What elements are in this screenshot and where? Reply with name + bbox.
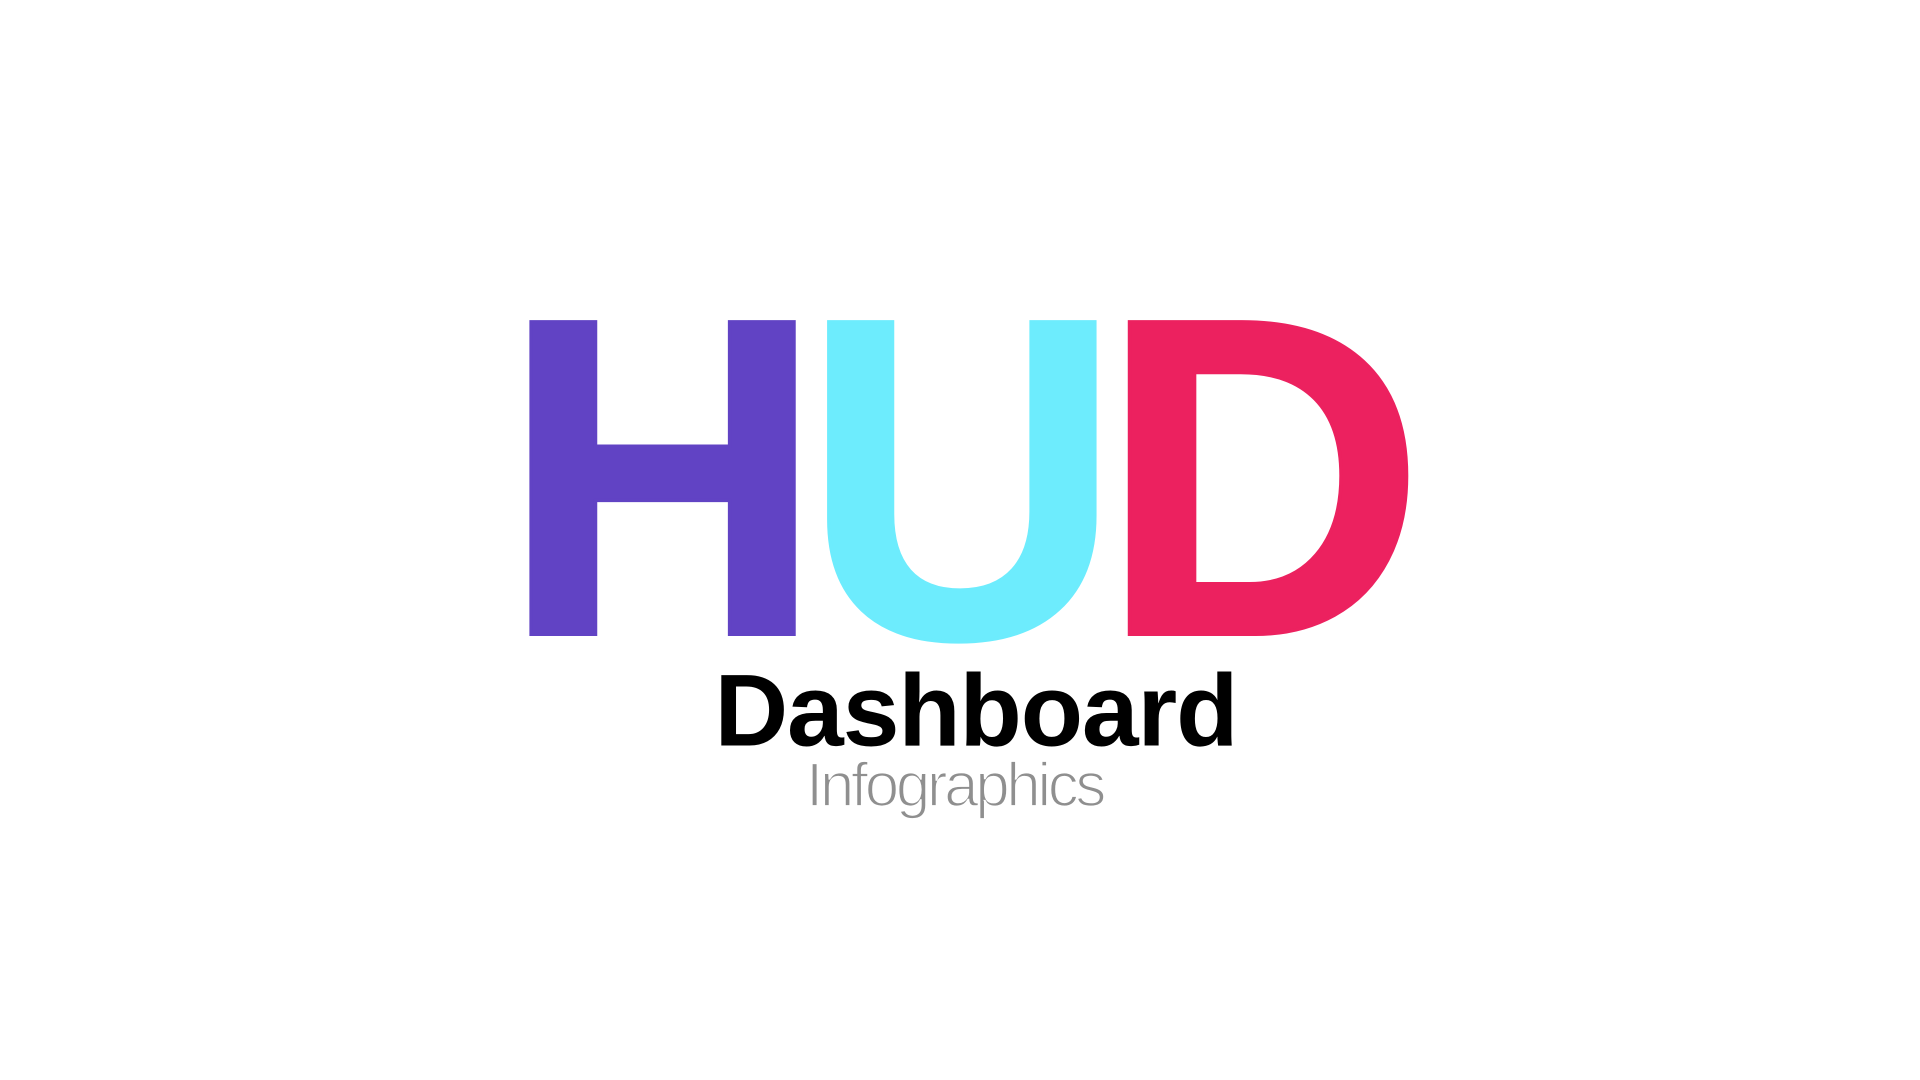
heading: Dashboard: Dashboard bbox=[714, 654, 1237, 768]
letter H: H bbox=[501, 224, 824, 731]
letter D: D bbox=[1099, 223, 1426, 730]
subheading: Infographics: Infographics bbox=[806, 751, 1104, 820]
letter U: U bbox=[802, 222, 1122, 735]
logotype: HUD bbox=[501, 222, 1426, 735]
